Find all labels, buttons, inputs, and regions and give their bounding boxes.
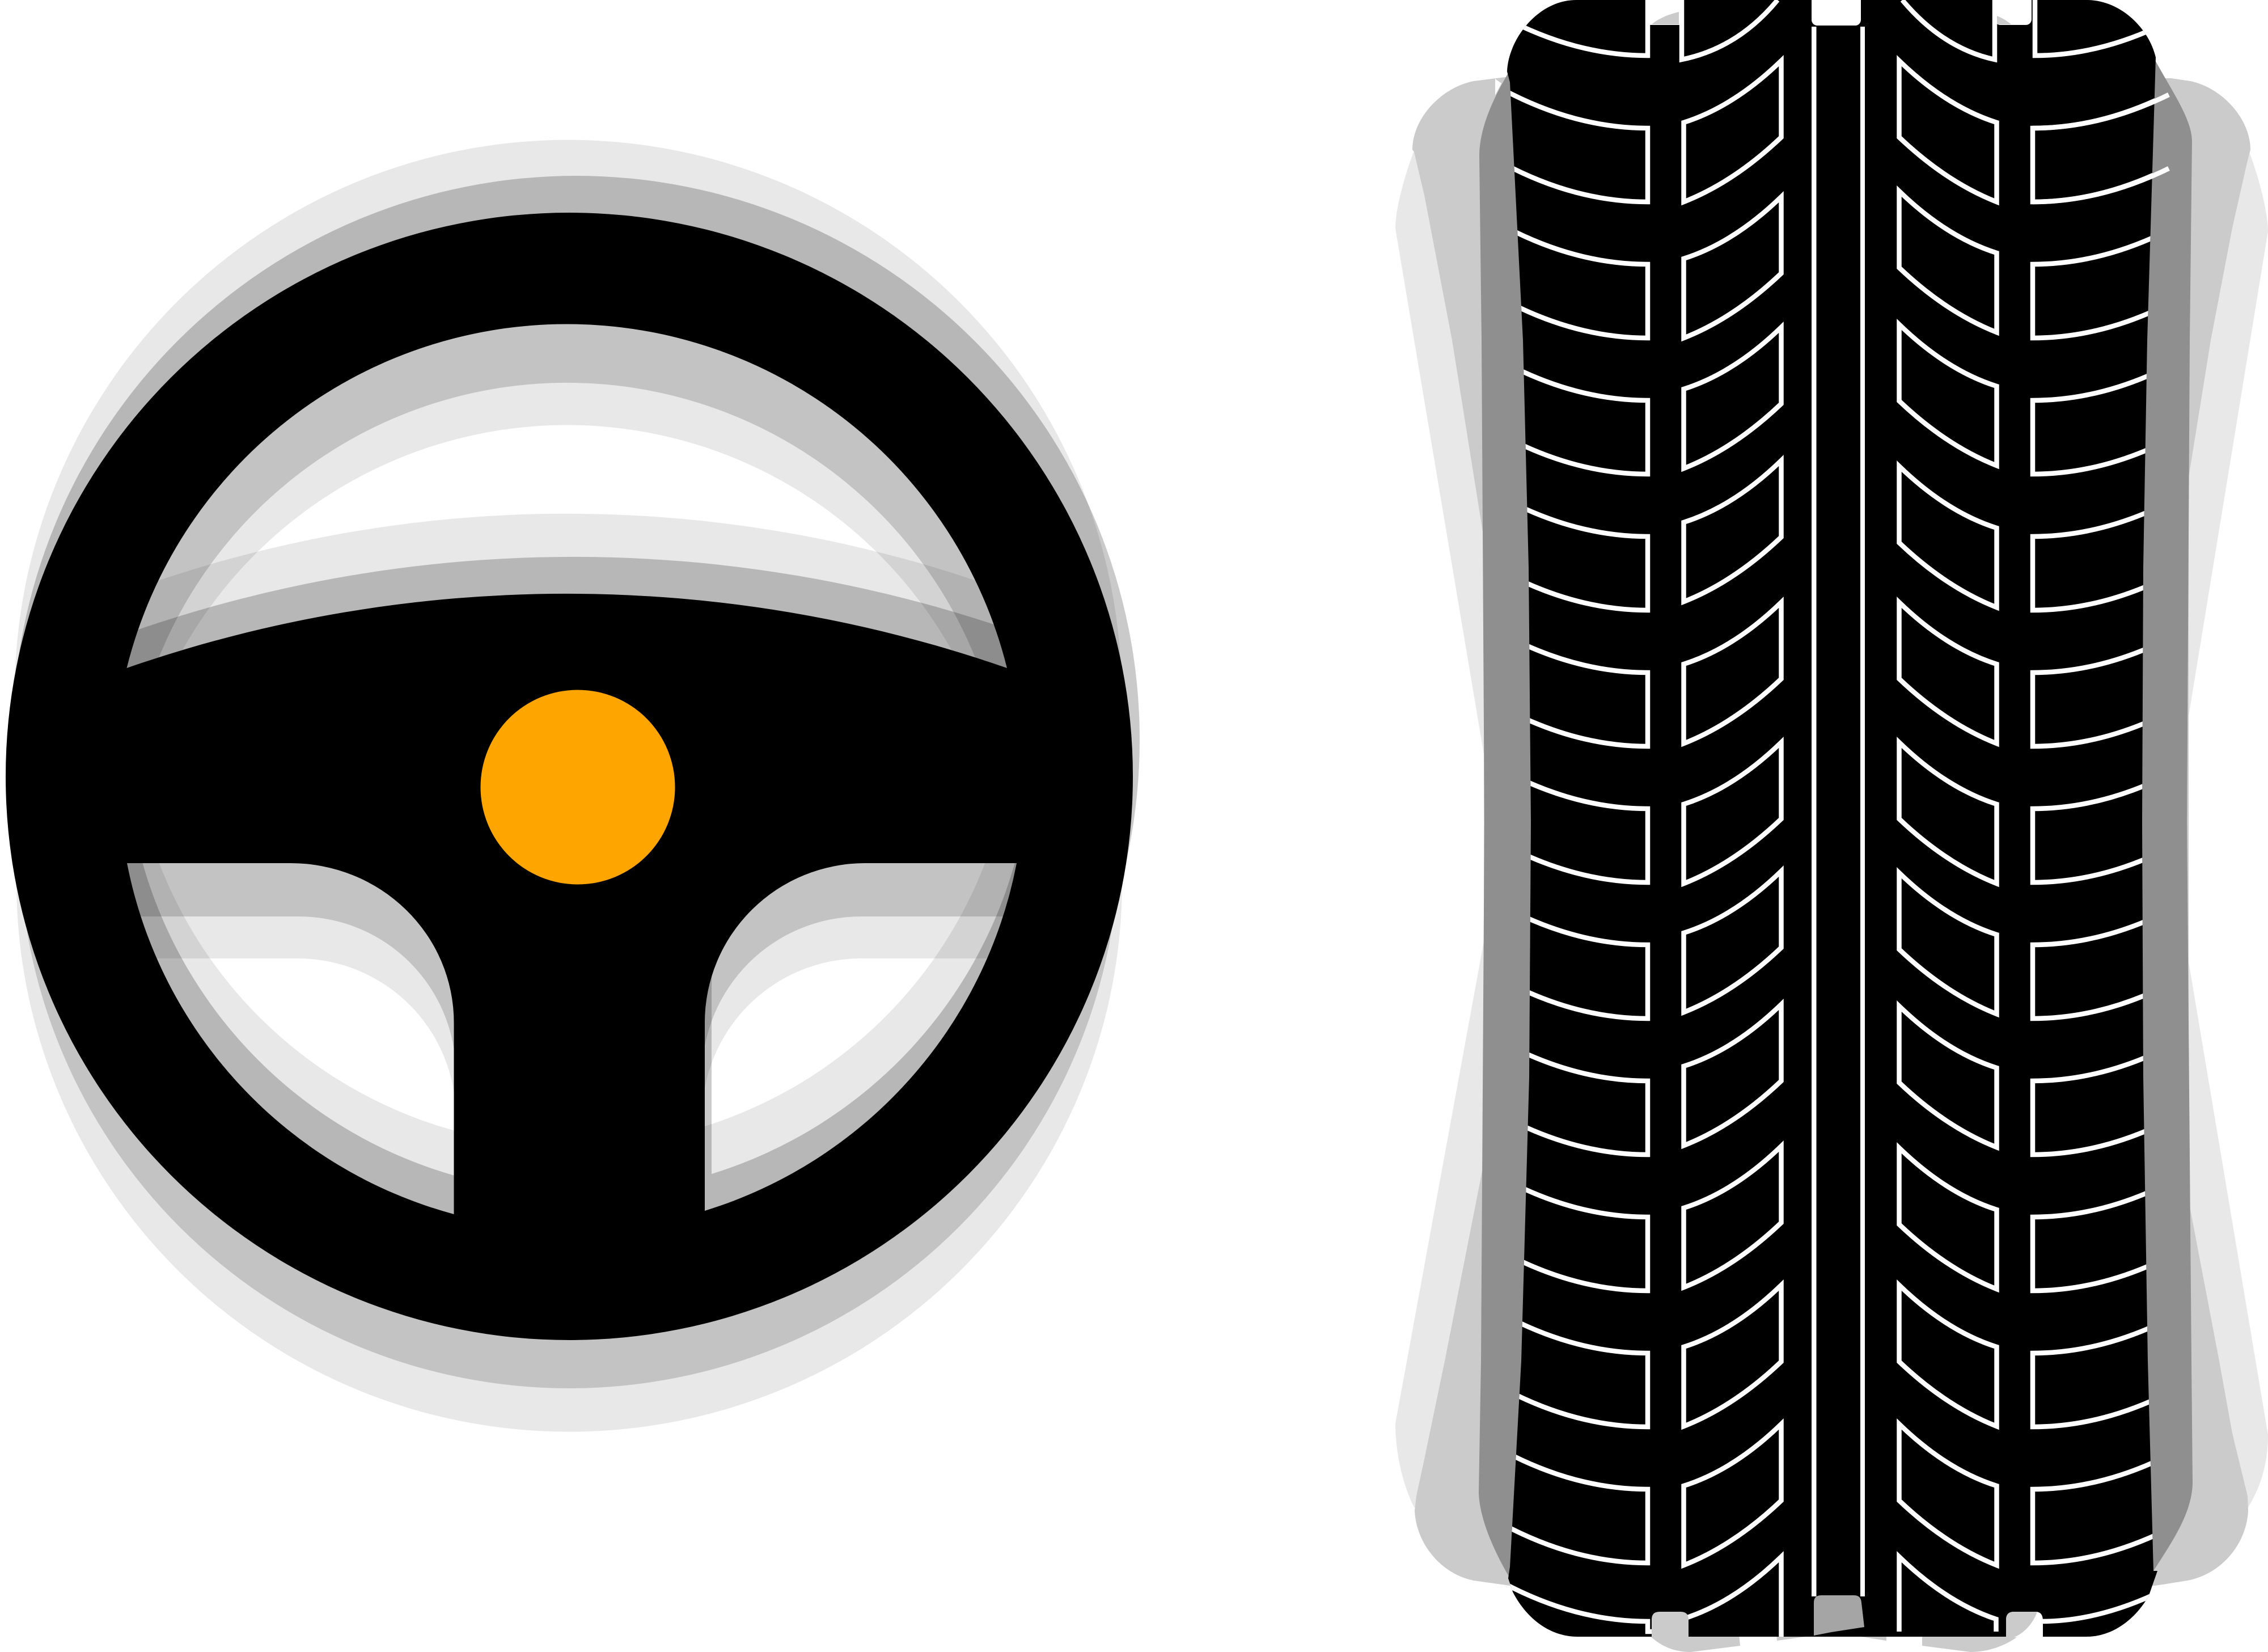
tyre ghost: outer light shape, right	[2098, 152, 2268, 1507]
bottom notch: right grey tab	[2006, 1612, 2037, 1637]
bottom notch: right white tab	[2006, 1612, 2043, 1637]
tread column: far left	[1510, 0, 1652, 1634]
tyre body	[1507, 0, 2157, 1637]
tread blocks clipped to the tyre body	[1510, 0, 2155, 1637]
tyre ghost: inner dark shape, left	[1479, 70, 1531, 1578]
tread ends overlapping the right ghost	[2033, 95, 2169, 202]
tread column: inner right	[1899, 0, 1997, 1632]
top notch: right grey fragment	[1997, 16, 2011, 24]
tyre ghost: lower right fragment	[1922, 1612, 2043, 1652]
top notch: right	[1995, 0, 2032, 25]
tyre ghost: inner dark shape, right	[2098, 57, 2193, 1571]
top notch: left grey fragment	[1652, 12, 1679, 24]
wheel ghost: far downward echo	[16, 255, 1122, 1432]
tyre ghost: middle grey shape, left	[1412, 77, 1531, 1586]
tyre ghost: middle grey shape, right	[2098, 78, 2250, 1586]
tread column: inner left	[1682, 0, 1782, 1637]
tread column: far right	[2030, 0, 2155, 1624]
top notch: left	[1650, 0, 1679, 25]
tyre ghost: lower centre wedges	[1776, 1627, 1886, 1641]
tyre icon	[1395, 0, 2268, 1652]
wheel ghost: near downward echo	[19, 291, 1119, 1388]
wheel ghost: far upward echo	[15, 140, 1122, 1247]
centre groove lines	[1812, 27, 1865, 1596]
wheel ghost: near upward echo	[12, 176, 1140, 1303]
ghost sliver near top left	[1495, 79, 1501, 95]
bottom notch: left grey tab	[1652, 1612, 1689, 1637]
wheel hub: orange circle	[481, 690, 675, 885]
bottom notch: centre grey tab	[1814, 1595, 1864, 1636]
steering wheel icon	[6, 140, 1140, 1432]
wheel: black rim and spokes	[6, 213, 1133, 1340]
top notch: centre	[1812, 0, 1861, 26]
tyre ghost: outer light shape, left	[1395, 152, 1531, 1507]
tyre ghost: lower left fragment	[1647, 1633, 1740, 1652]
